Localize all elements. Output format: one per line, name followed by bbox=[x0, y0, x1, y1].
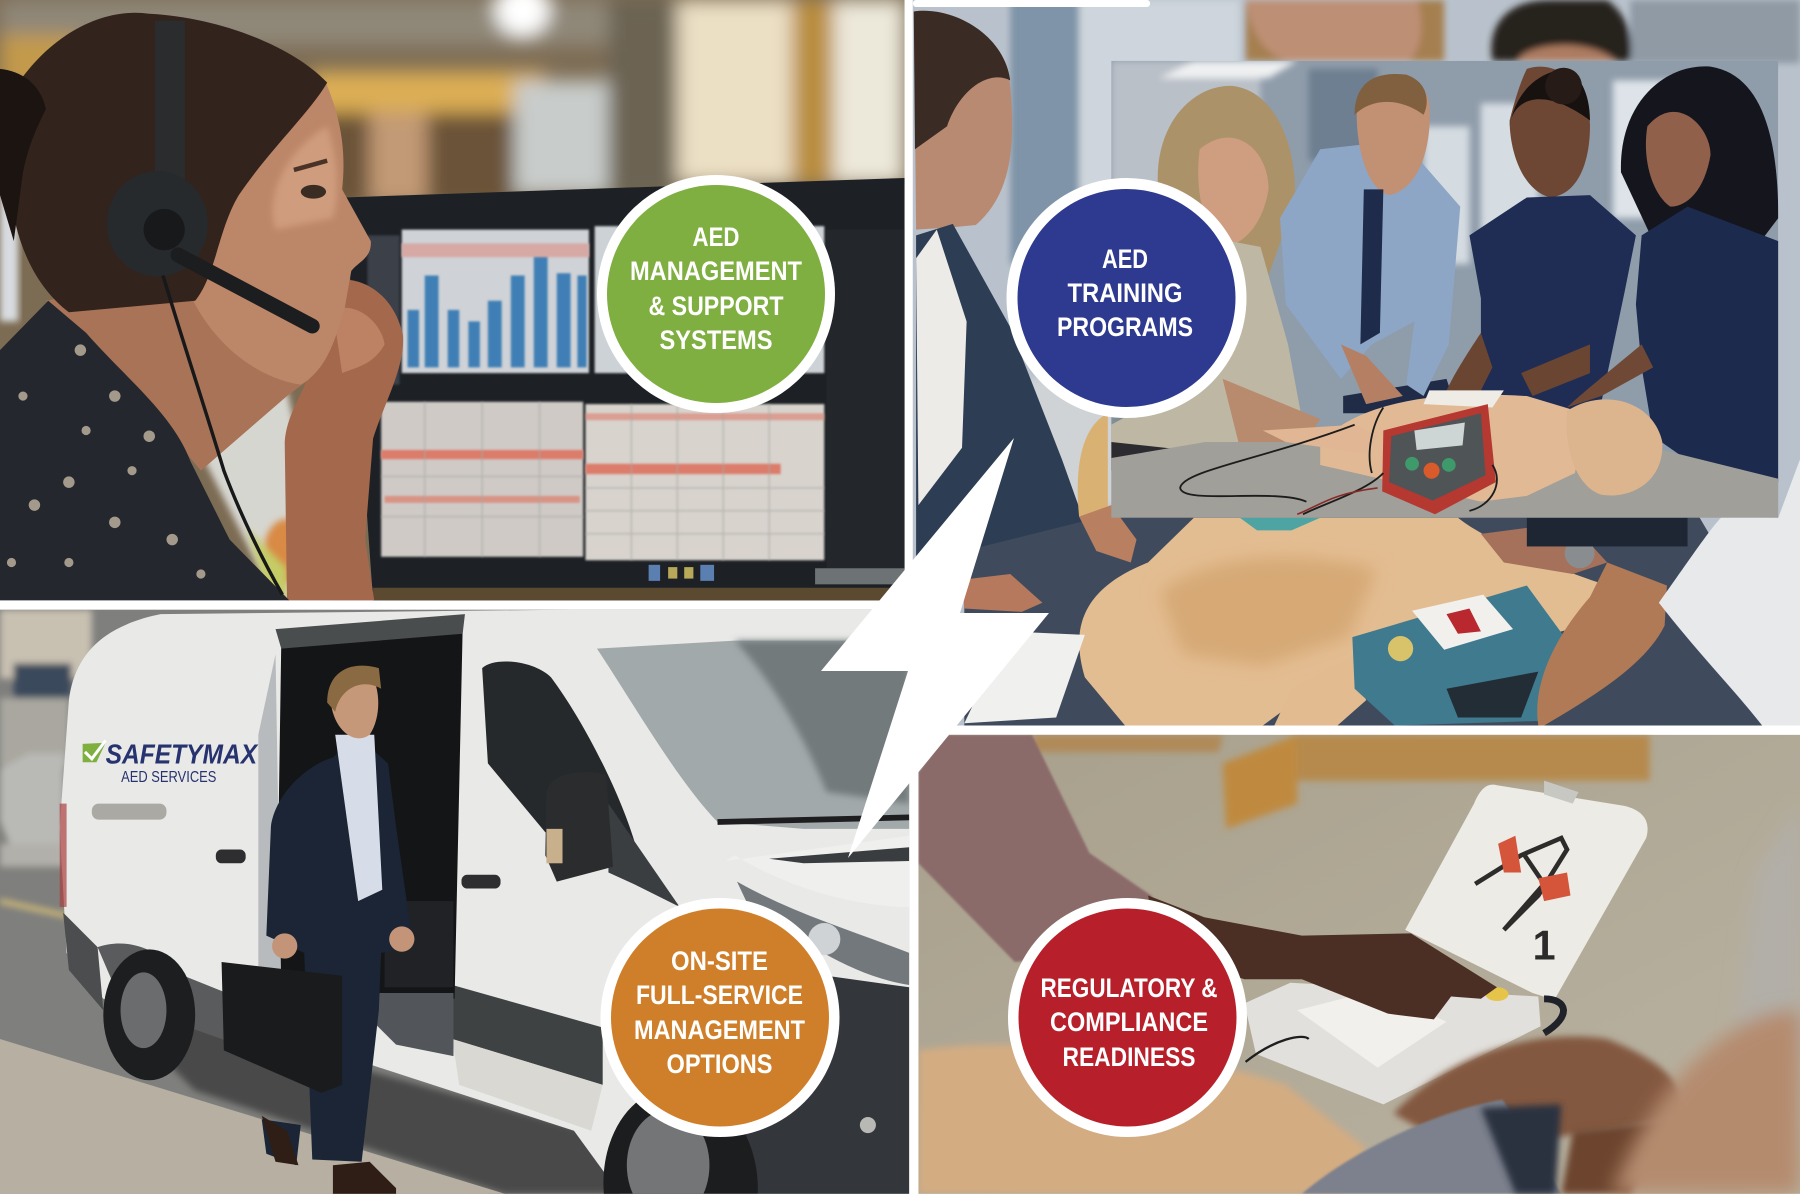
van logo text: AED SERVICES bbox=[121, 769, 216, 786]
badge: AED management and support systems: AED bbox=[692, 222, 740, 252]
badge: on-site full-service management options bbox=[600, 898, 840, 1137]
lid pictogram bbox=[1475, 836, 1570, 969]
badge: AED management and support systems bbox=[597, 175, 835, 413]
van logo text bbox=[82, 740, 258, 782]
badge: AED management and support systems: SYSTEMS bbox=[660, 325, 772, 355]
lightning bolt divider bbox=[821, 438, 1049, 858]
hood & headlight bbox=[726, 836, 909, 907]
door handles and panel details bbox=[92, 804, 166, 820]
woman with dark hair right bbox=[1621, 66, 1778, 247]
badge: regulatory and compliance readiness: READINESS bbox=[1062, 1042, 1196, 1072]
table bbox=[964, 517, 1800, 726]
table and manikin in inset bbox=[1111, 442, 1778, 518]
red AED trainer bbox=[1382, 404, 1496, 514]
panel: call-centre operator at monitors bbox=[0, 0, 905, 600]
forearm and white sleeve bbox=[1537, 563, 1667, 726]
badge: AED training programs: TRAINING bbox=[1068, 278, 1182, 308]
arm and hand bbox=[1148, 895, 1497, 1019]
badge: AED management and support systems: MANAGEMENT bbox=[630, 256, 802, 286]
woman in polo centre bbox=[1510, 67, 1590, 197]
white top notch bbox=[913, 0, 1150, 7]
man in blue shirt bbox=[1343, 379, 1458, 413]
sleeve bbox=[918, 735, 1153, 962]
van body bbox=[60, 610, 909, 1194]
badge: regulatory and compliance readiness bbox=[1008, 898, 1247, 1137]
badge: AED management and support systems: & SUPPORT bbox=[648, 291, 784, 321]
headset bbox=[107, 21, 312, 595]
panel: hand pressing AED button bbox=[918, 735, 1800, 1194]
hand bbox=[285, 279, 403, 600]
badge: on-site full-service management options: ON-SITE bbox=[671, 946, 768, 976]
panel: service van with technician bbox=[0, 610, 909, 1194]
badge: regulatory and compliance readiness: REGULATORY & bbox=[1040, 973, 1218, 1003]
badge: on-site full-service management options: FULL-SERVICE bbox=[636, 980, 803, 1010]
blonde woman bbox=[1158, 86, 1295, 276]
pale background behind shoulder bbox=[204, 392, 328, 600]
patient torso and head, blurred bbox=[918, 1044, 1366, 1194]
briefcase bbox=[222, 962, 342, 1093]
paper bbox=[964, 631, 1085, 723]
monitor bbox=[344, 178, 905, 600]
side window and mirror bbox=[482, 661, 638, 855]
sliding door opening bbox=[278, 632, 463, 999]
face bbox=[189, 80, 371, 385]
manikin torso bbox=[1079, 518, 1607, 726]
van logo text: SAFETYMAX bbox=[106, 738, 259, 769]
hands bbox=[1079, 505, 1137, 563]
badge: AED training programs: PROGRAMS bbox=[1057, 312, 1193, 342]
dark sill and wheel arches bbox=[63, 913, 103, 1010]
hair bbox=[8, 13, 327, 312]
panel: AED training group bbox=[913, 0, 1800, 726]
road shadow under van bbox=[172, 1029, 620, 1194]
seated woman left bbox=[914, 11, 1012, 230]
AED base bbox=[1244, 983, 1541, 1104]
windshield bbox=[597, 641, 909, 829]
man in suit bbox=[262, 666, 414, 1194]
badge: on-site full-service management options: MANAGEMENT bbox=[634, 1015, 805, 1045]
lid of AED bbox=[1405, 785, 1648, 1000]
badge: regulatory and compliance readiness: COMPLIANCE bbox=[1050, 1007, 1208, 1037]
lid pictogram: 1 bbox=[1533, 923, 1556, 969]
badge: AED training programs bbox=[1006, 178, 1246, 418]
badge: AED training programs: AED bbox=[1102, 244, 1148, 274]
bumper bbox=[735, 976, 909, 1194]
shirt with dots bbox=[0, 301, 289, 600]
teal AED bbox=[1352, 585, 1570, 726]
neck bbox=[46, 299, 310, 470]
badge: on-site full-service management options: OPTIONS bbox=[666, 1049, 772, 1079]
inset photo: team practising on manikin bbox=[1111, 61, 1778, 518]
